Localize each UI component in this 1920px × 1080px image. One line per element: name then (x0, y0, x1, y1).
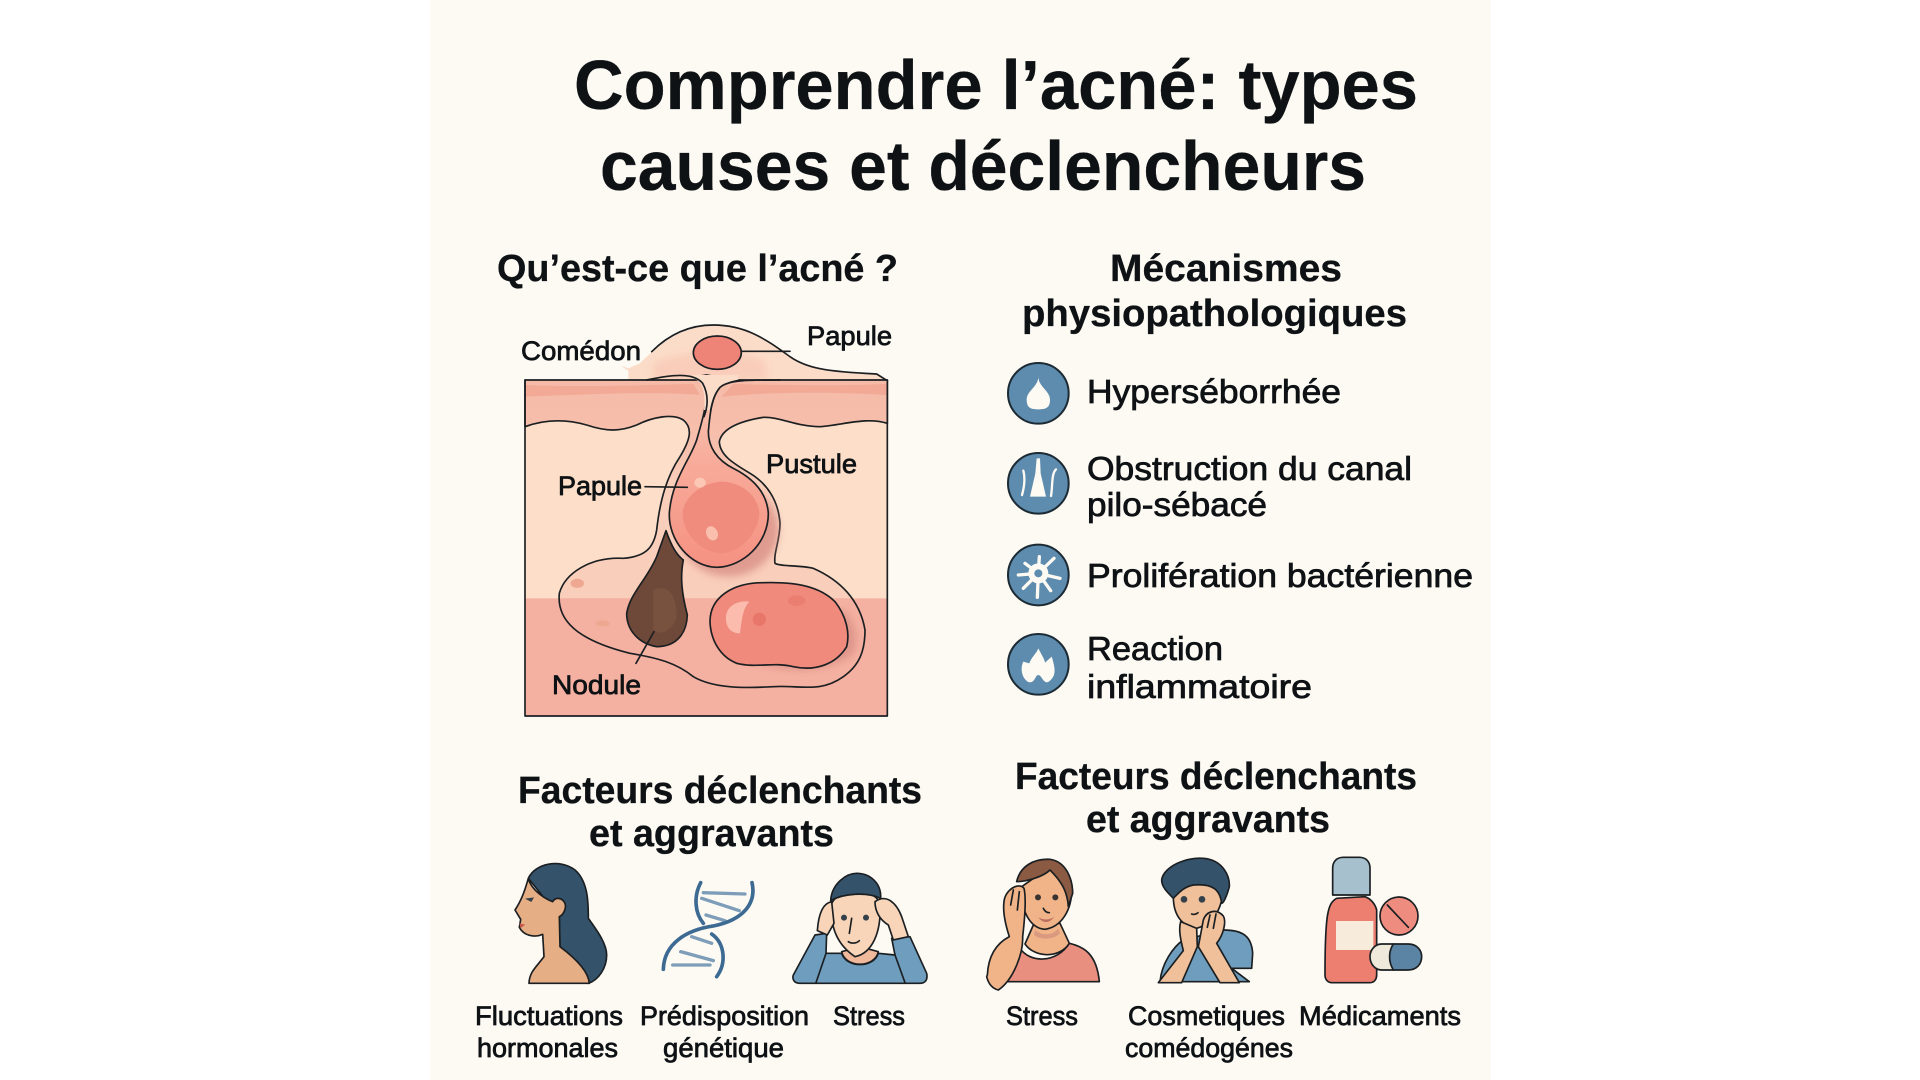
canal and pustule (669, 375, 768, 567)
icon: DNA helix (663, 883, 753, 977)
label: Cosmetiques comédogénes: Cosmetiques (1128, 1001, 1285, 1031)
icon: woman profile (515, 864, 607, 983)
text: Reaction inflammatoire: Reaction (1087, 630, 1223, 667)
heading: triggers right: Facteurs déclenchants (1015, 756, 1417, 798)
heading: mechanisms: Mécanismes (1110, 248, 1342, 290)
small papule (693, 336, 741, 369)
lesion shadows (678, 483, 778, 577)
label: Fluctuations hormonales: Fluctuations (475, 1001, 623, 1031)
label: Prédisposition génétique: génétique (663, 1033, 784, 1063)
icon: flame (1008, 634, 1069, 695)
label: Papule top: Papule (807, 321, 892, 351)
comedo hair follicle (627, 531, 687, 647)
title: causes et déclencheurs (600, 127, 1366, 205)
label: Stress right: Stress (1006, 1001, 1078, 1031)
label: Médicaments: Médicaments (1299, 1001, 1461, 1031)
box frame (525, 380, 887, 716)
skin block (525, 380, 887, 716)
label: Papule middle: Papule (558, 471, 642, 501)
heading: triggers right: et aggravants (1086, 799, 1330, 841)
nodule (710, 583, 848, 668)
heading: mechanisms: physiopathologiques (1022, 293, 1407, 335)
text: Obstruction du canal: Obstruction du canal (1087, 450, 1412, 487)
icon: medication (1325, 857, 1422, 983)
heading: triggers left: Facteurs déclenchants (518, 770, 922, 812)
icon: sebum drop (1008, 363, 1069, 424)
label: Prédisposition génétique: Prédisposition (640, 1001, 809, 1031)
heading: mechanisms (1022, 248, 1407, 335)
icon: bacteria (1008, 545, 1069, 605)
icon: blocked canal (1008, 453, 1069, 514)
heading: triggers left: et aggravants (589, 813, 834, 855)
text: Obstruction du canal (1087, 450, 1412, 523)
icon: stressed woman (987, 859, 1099, 990)
title: Comprendre l’acné: types (574, 46, 1418, 124)
dermal region outline (525, 380, 887, 687)
icon: stressed man (793, 873, 927, 983)
heading: what is acne: Qu’est-ce que l’acné ? (497, 248, 898, 290)
text: Hyperséborrhée: Hyperséborrhée (1087, 373, 1341, 410)
label: Fluctuations hormonales (475, 1001, 623, 1063)
text: Reaction inflammatoire: inflammatoire (1087, 668, 1312, 705)
icon: man touching face (1158, 858, 1253, 983)
text: Reaction inflammatoire (1087, 630, 1312, 705)
title (574, 46, 1418, 205)
label: Cosmetiques comédogénes (1125, 1001, 1293, 1063)
label: Cosmetiques comédogénes: comédogénes (1125, 1033, 1293, 1063)
label: Nodule: Nodule (552, 670, 641, 700)
label: Fluctuations hormonales: hormonales (477, 1033, 618, 1063)
heading: triggers left (518, 770, 922, 855)
label: Stress left: Stress (833, 1001, 905, 1031)
text: Prolifération bactérienne: Prolifération bactérienne (1087, 557, 1473, 594)
panel: skin cross-section diagram (525, 325, 887, 716)
label: Prédisposition génétique (640, 1001, 809, 1063)
skin bump (621, 325, 887, 381)
heading: triggers right (1015, 756, 1417, 841)
text: Obstruction du canal: pilo-sébacé (1087, 486, 1267, 523)
label: Comédon: Comédon (521, 336, 641, 366)
label: Pustule: Pustule (766, 449, 857, 479)
